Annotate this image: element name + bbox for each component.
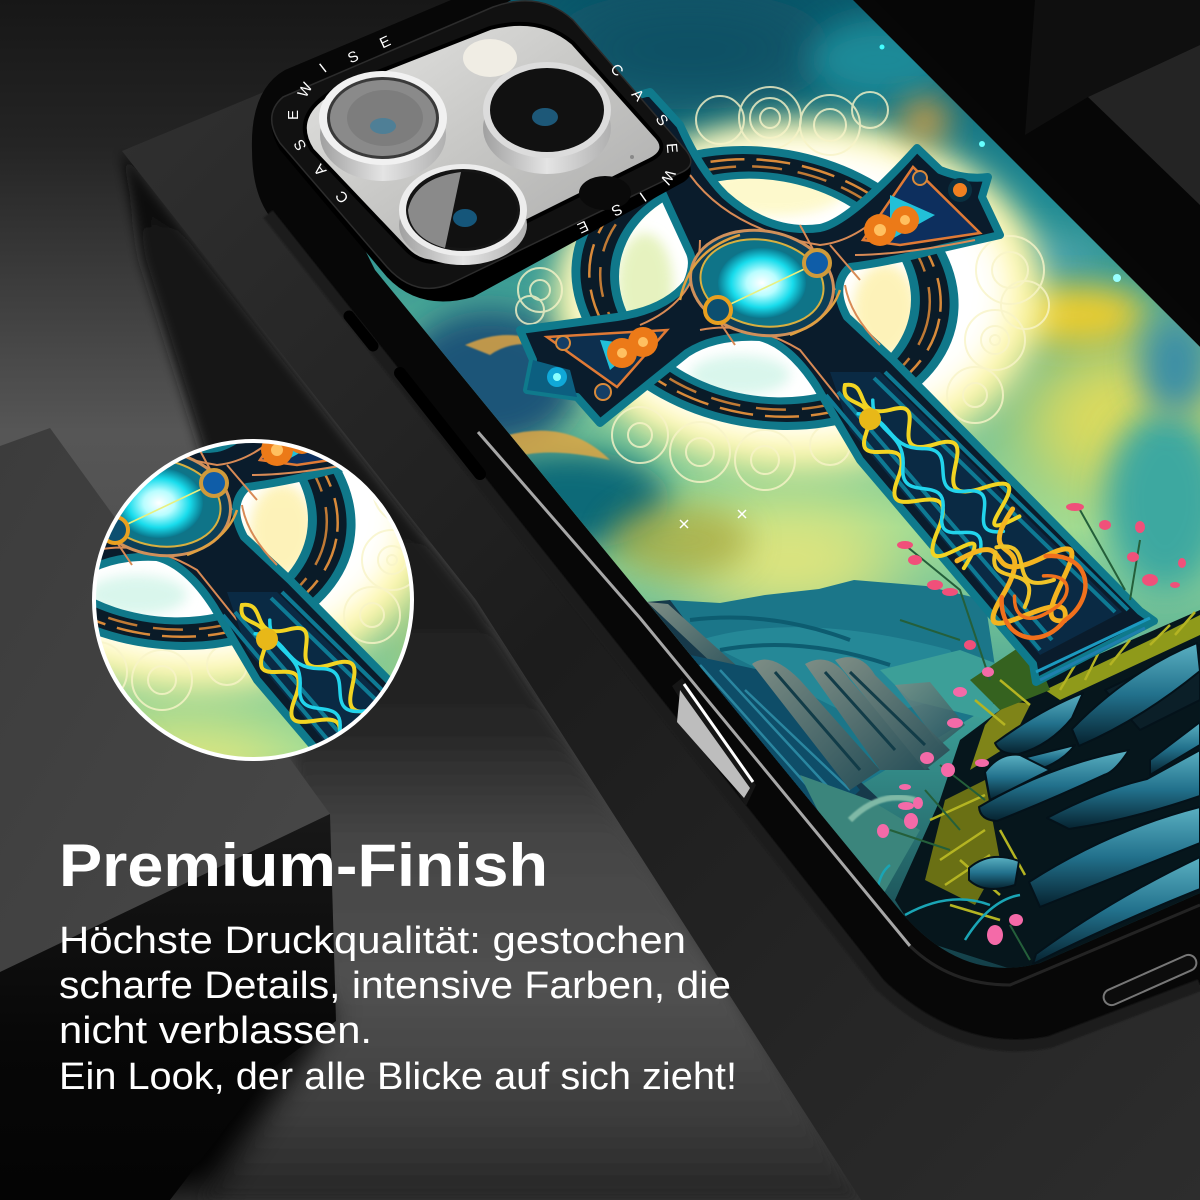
CASEWISE lettering: C (607, 61, 627, 80)
CASEWISE lettering: I (316, 60, 330, 76)
zoom circle callout (92, 439, 414, 761)
title: Premium-Finish (59, 832, 548, 899)
distant mountains (669, 580, 1000, 810)
pink flowers (877, 503, 1186, 960)
body text (59, 920, 737, 1098)
body text: scharfe Details, intensive Farben, die (59, 965, 731, 1007)
body text: nicht verblassen. (59, 1010, 372, 1052)
sky (250, 0, 1200, 975)
tinted ring openings (617, 164, 917, 395)
cross inner tracery (640, 175, 975, 400)
CASEWISE lettering: E (663, 142, 680, 154)
cross silhouette (520, 92, 1154, 682)
phone artwork (366, 0, 1200, 968)
CASEWISE lettering: C (332, 187, 352, 206)
edge highlight (478, 432, 910, 946)
body text: Höchste Druckqualität: gestochen (59, 920, 686, 962)
flash (463, 39, 517, 77)
rocky ridges (647, 600, 965, 900)
CASEWISE lettering: S (652, 111, 671, 129)
CASEWISE lettering: W (656, 166, 678, 188)
bezel ring (272, 1, 691, 288)
volume buttons (400, 373, 480, 474)
CASEWISE lettering: W (295, 79, 317, 101)
left arm panel (527, 327, 667, 400)
CASEWISE lettering (285, 33, 680, 236)
CASEWISE lettering: I (636, 188, 649, 205)
lower left block (0, 428, 330, 972)
stone slabs (969, 643, 1200, 964)
camera bezel module (272, 1, 691, 301)
phone case body (252, 0, 1200, 1045)
camera window (305, 24, 661, 262)
ring (549, 116, 981, 460)
medallion with glowing orb (680, 219, 842, 347)
CASEWISE lettering: S (291, 136, 310, 153)
microphone hole (630, 155, 634, 159)
dark wedge soft shadow (100, 1005, 336, 1190)
CASEWISE lettering: S (345, 48, 361, 67)
celtic cross (520, 92, 1154, 682)
mute switch (349, 316, 373, 346)
right arm panel (863, 167, 980, 246)
CASEWISE lettering: E (575, 217, 591, 236)
dark wedge behind text (0, 814, 336, 1200)
lens one (319, 71, 447, 181)
body text: Ein Look, der alle Blicke auf sich zieht! (59, 1056, 737, 1098)
shaft knotwork (807, 349, 1150, 680)
CASEWISE lettering: A (628, 86, 647, 105)
foreground hill and grass (895, 610, 1200, 975)
lens three (399, 164, 527, 265)
bezel shadow side (272, 5, 691, 301)
block shaded face (122, 151, 861, 1200)
CASEWISE lettering: E (377, 33, 393, 52)
side button (672, 678, 756, 806)
top right black block (860, 0, 1200, 400)
speaker grille (1101, 952, 1199, 1008)
CASEWISE lettering: S (609, 200, 625, 219)
cloud whorls (516, 87, 1049, 490)
lidar sensor (579, 176, 631, 210)
CASEWISE lettering: E (285, 110, 302, 120)
lens two (483, 62, 611, 174)
CASEWISE lettering: A (311, 160, 330, 179)
